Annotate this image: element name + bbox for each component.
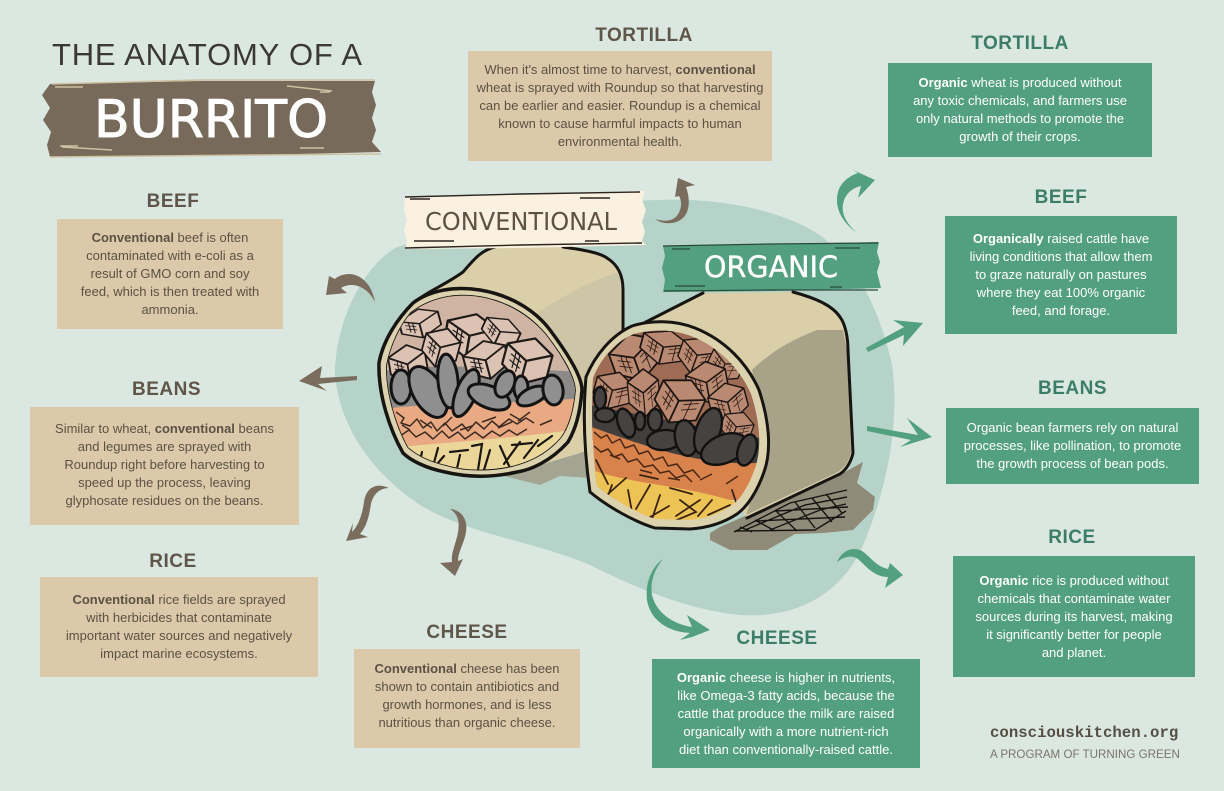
text block: it significantly better for people [986,626,1162,642]
text block: and planet. [1042,644,1106,660]
website: consciouskitchen.org [990,724,1178,742]
beans [391,353,565,424]
text block: Organic rice is produced without [979,572,1169,588]
panel: conventional rice [40,551,318,677]
cut face [379,289,582,476]
heading: RICE [149,551,197,572]
text block: Conventional cheese has been [374,660,559,676]
footer: website and program credit [990,724,1180,761]
text block: Organic bean farmers rely on natural [967,420,1178,435]
arrow: conventional cheese [440,509,466,576]
heading: CHEESE [426,622,508,643]
text block [30,407,299,525]
rice layer [592,427,756,500]
banner: organic [662,242,881,292]
text block: result of GMO corn and soy [91,266,249,281]
text block: When it's almost time to harvest, conventional [484,62,756,77]
heading: BEEF [147,191,199,212]
illustration: organic burrito [580,292,875,550]
meat layer [386,296,575,400]
heading: BEANS [1038,378,1107,399]
text block: speed up the process, leaving [78,475,251,490]
text block [57,219,283,329]
banner: conventional [404,191,646,249]
text block [946,408,1199,484]
panel: conventional beans [30,379,299,525]
cheese layer [595,471,736,520]
text block: important water sources and negatively [66,628,292,643]
text block: Similar to wheat, conventional beans [55,421,274,436]
text block [354,649,580,748]
text block: to graze naturally on pastures [975,267,1147,282]
heading: BEANS [132,379,201,400]
text block: organically with a more nutrient-rich [683,724,889,738]
text block: chemicals that contaminate water [978,590,1170,606]
meat layer [592,330,760,440]
panel: organic beans [946,378,1199,484]
text block: cattle that produce the milk are raised [678,706,894,720]
heading: TORTILLA [971,33,1069,54]
text block: where they eat 100% organic [977,285,1145,300]
panel: organic cheese [652,628,920,768]
cast shadow [500,445,592,485]
text block: impact marine ecosystems. [100,646,258,661]
text block: with herbicides that contaminate [86,610,272,625]
text block: nutritious than organic cheese. [378,714,556,730]
cheese strokes [596,460,737,522]
crosshatch [734,490,848,532]
heading: CHEESE [736,628,818,649]
title line: THE ANATOMY OF A [52,37,362,72]
arrow: organic beef [866,320,923,352]
shadow [710,462,875,550]
text block [40,577,318,677]
text block: like Omega-3 fatty acids, because the [677,688,895,702]
arrow: organic tortilla [837,170,875,233]
text block: Organically raised cattle have [973,231,1149,246]
arrow: organic beans [867,418,932,447]
text block: living conditions that allow them [970,249,1152,264]
text block: sources during its harvest, making [975,608,1173,624]
text block [652,659,920,768]
beef cubes [608,334,658,378]
text block: and legumes are sprayed with [78,439,251,454]
arrow: organic cheese [647,559,710,640]
text block: wheat is sprayed with Roundup so that harvesting [477,80,763,95]
text block: ammonia. [141,302,199,317]
panel: conventional beef [57,191,283,329]
text block [888,63,1152,157]
text block: Organic wheat is produced without [918,75,1122,90]
heading: BEEF [1035,187,1087,208]
text block: feed, which is then treated with [81,284,259,299]
text block: can be earlier and easier. Roundup is a chemical [479,98,761,113]
bean layer [378,367,585,415]
tortilla body [640,292,853,518]
arrow: conventional rice [346,486,389,541]
text block: feed, and forage. [1012,303,1110,318]
text block: processes, like pollination, to promote [964,438,1181,453]
text block: diet than conventionally-raised cattle. [679,742,893,756]
panel: conventional cheese [354,622,580,748]
panel: organic beef [945,187,1177,334]
illustration: conventional burrito [375,247,624,490]
beef cubes [400,308,442,338]
arrow: conventional tortilla [655,178,695,223]
rice layer [392,398,574,449]
bean layer [590,405,770,470]
credit: A PROGRAM OF TURNING GREEN [990,748,1180,761]
cheese layer [408,430,565,470]
arrow: conventional beans [299,366,357,391]
text block: glyphosate residues on the beans. [65,493,264,508]
text block: Roundup right before harvesting to [64,457,265,472]
panel: organic tortilla [888,33,1152,157]
text block: Conventional rice fields are sprayed [72,592,286,607]
text block: known to cause harmful impacts to human [498,116,742,131]
panel: conventional tortilla [468,25,772,161]
background blob [335,200,894,615]
tortilla body [413,247,624,472]
title: BURRITO [94,90,328,150]
panel: organic rice [953,527,1195,677]
rice strokes [594,432,738,484]
rice strokes [396,412,552,439]
arrow: conventional beef [326,274,375,302]
title banner [42,81,381,157]
text block: growth hormones, and is less [382,696,552,712]
heading: RICE [1048,527,1096,548]
banner: conventional: CONVENTIONAL [425,207,617,236]
arrow: organic rice [837,549,903,588]
title [42,37,381,157]
text block: any toxic chemicals, and farmers use [913,93,1127,108]
text block: shown to contain antibiotics and [375,678,559,694]
text block: growth of their crops. [959,129,1081,144]
text block: environmental health. [558,134,682,149]
text block: contaminated with e-coli as a [86,248,254,263]
text block [945,216,1177,334]
text block: only natural methods to promote the [916,111,1124,126]
beans [594,387,761,471]
text block: the growth process of bean pods. [976,456,1169,471]
text block [953,556,1195,677]
cheese strokes [420,434,554,470]
cut face [584,322,769,529]
text block [468,51,772,161]
banner: organic: ORGANIC [704,250,838,284]
text block: Conventional beef is often [92,230,248,245]
text block: Organic cheese is higher in nutrients, [677,670,895,684]
heading: TORTILLA [595,25,693,46]
